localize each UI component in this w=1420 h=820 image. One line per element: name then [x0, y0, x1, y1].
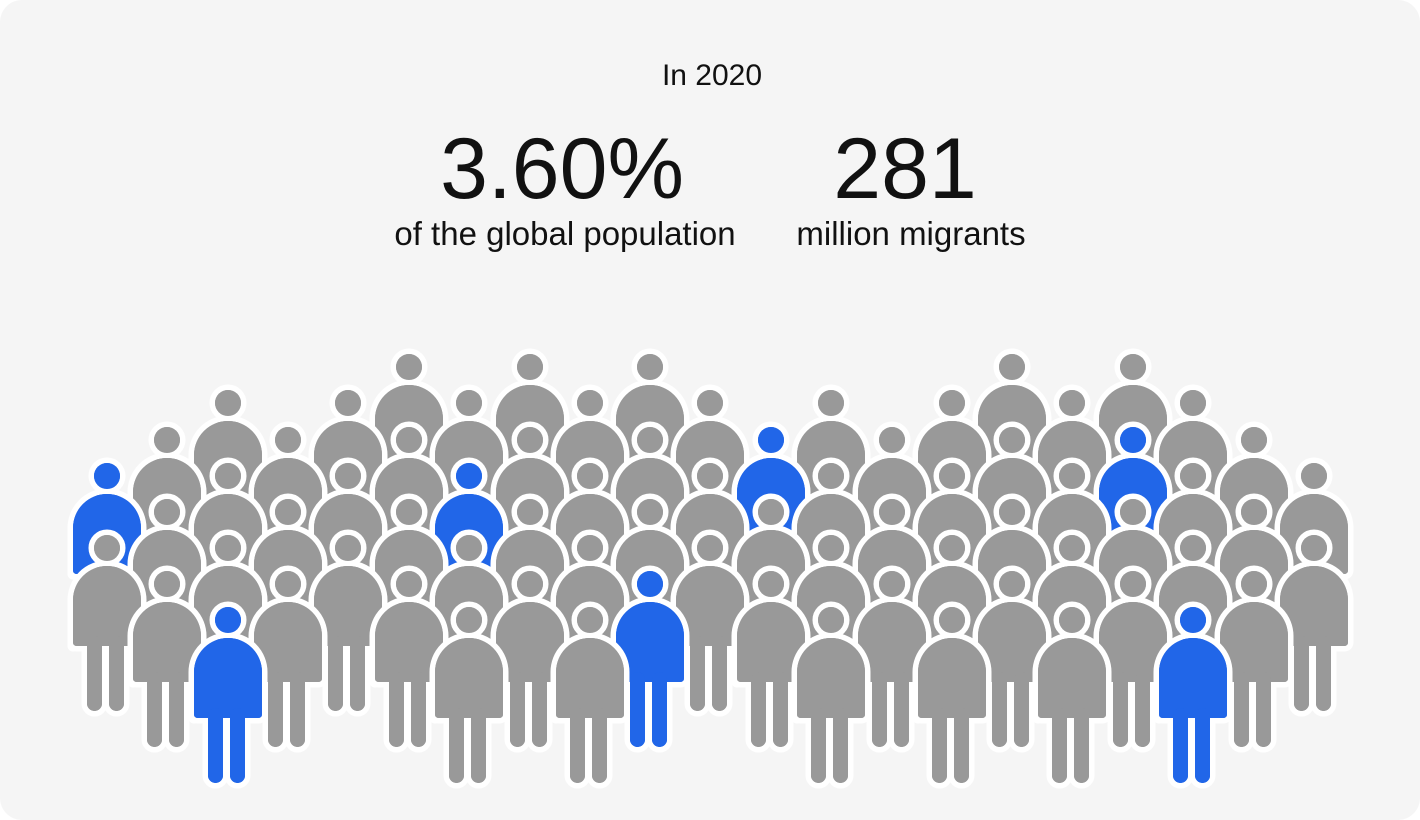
crowd of people icons (blue = migrants) [73, 354, 1348, 783]
stat: 3.60% of the global population: 3.60% [440, 121, 684, 217]
stat: 281 million migrants [796, 121, 1026, 252]
stat: 281 million migrants: million migrants [796, 215, 1026, 252]
heading: In 2020: In 2020 [662, 59, 762, 92]
stat: 3.60% of the global population [394, 121, 736, 252]
stat: 3.60% of the global population: of the global population [394, 215, 736, 252]
stat: 281 million migrants: 281 [833, 121, 977, 217]
